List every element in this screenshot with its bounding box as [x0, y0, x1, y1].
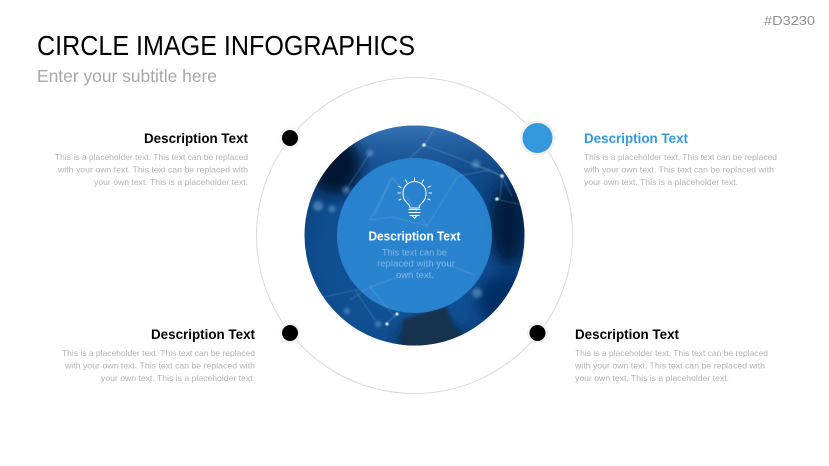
document code: #D3230	[764, 14, 815, 28]
center body text: own text.	[396, 270, 434, 280]
center body text: replaced with your	[377, 258, 455, 268]
icon: light bulb	[398, 178, 432, 218]
text block: bottom left: This is a placeholder text. This text can be replaced	[62, 348, 255, 358]
text block: top right: with your own text. This text can be replaced with	[583, 164, 774, 174]
text block: top left: with your own text. This text can be replaced with	[57, 164, 248, 174]
text block: bottom right: Description Text	[575, 326, 679, 342]
text block: bottom right	[574, 326, 768, 383]
title: CIRCLE IMAGE INFOGRAPHICS	[37, 30, 415, 61]
text block: top right: This is a placeholder text. This text can be replaced	[584, 152, 777, 162]
text block: bottom left: Description Text	[151, 326, 255, 342]
text block: bottom right: This is a placeholder text. This text can be replaced	[575, 348, 768, 358]
text block: top left: your own text. This is a placeholder text.	[94, 177, 248, 187]
text block: top right: your own text. This is a placeholder text.	[584, 177, 738, 187]
text block: top left: This is a placeholder text. This text can be replaced	[55, 152, 248, 162]
marker: top left	[280, 128, 300, 148]
marker: top right active	[520, 120, 555, 156]
marker: bottom left	[280, 322, 300, 344]
center body text: This text can be	[382, 248, 447, 258]
inner translucent circle	[337, 158, 492, 318]
text block: bottom right: your own text. This is a placeholder text.	[575, 373, 729, 383]
marker: bottom right	[527, 322, 548, 344]
text block: top right	[583, 130, 777, 187]
center heading: Description Text	[368, 230, 461, 244]
text block: top left	[55, 130, 248, 187]
text block: bottom left: with your own text. This text can be replaced with	[64, 360, 255, 370]
outer ring	[256, 78, 572, 394]
text block: top right: Description Text	[584, 130, 688, 146]
text block: bottom left: your own text. This is a placeholder text.	[101, 373, 255, 383]
center body text	[377, 248, 455, 280]
central image circle	[304, 120, 533, 354]
text block: bottom right: with your own text. This text can be replaced with	[574, 360, 765, 370]
infographic canvas	[38, 16, 814, 394]
text block: top left: Description Text	[144, 130, 248, 146]
text block: bottom left	[62, 326, 255, 383]
subtitle: Enter your subtitle here	[37, 66, 217, 86]
